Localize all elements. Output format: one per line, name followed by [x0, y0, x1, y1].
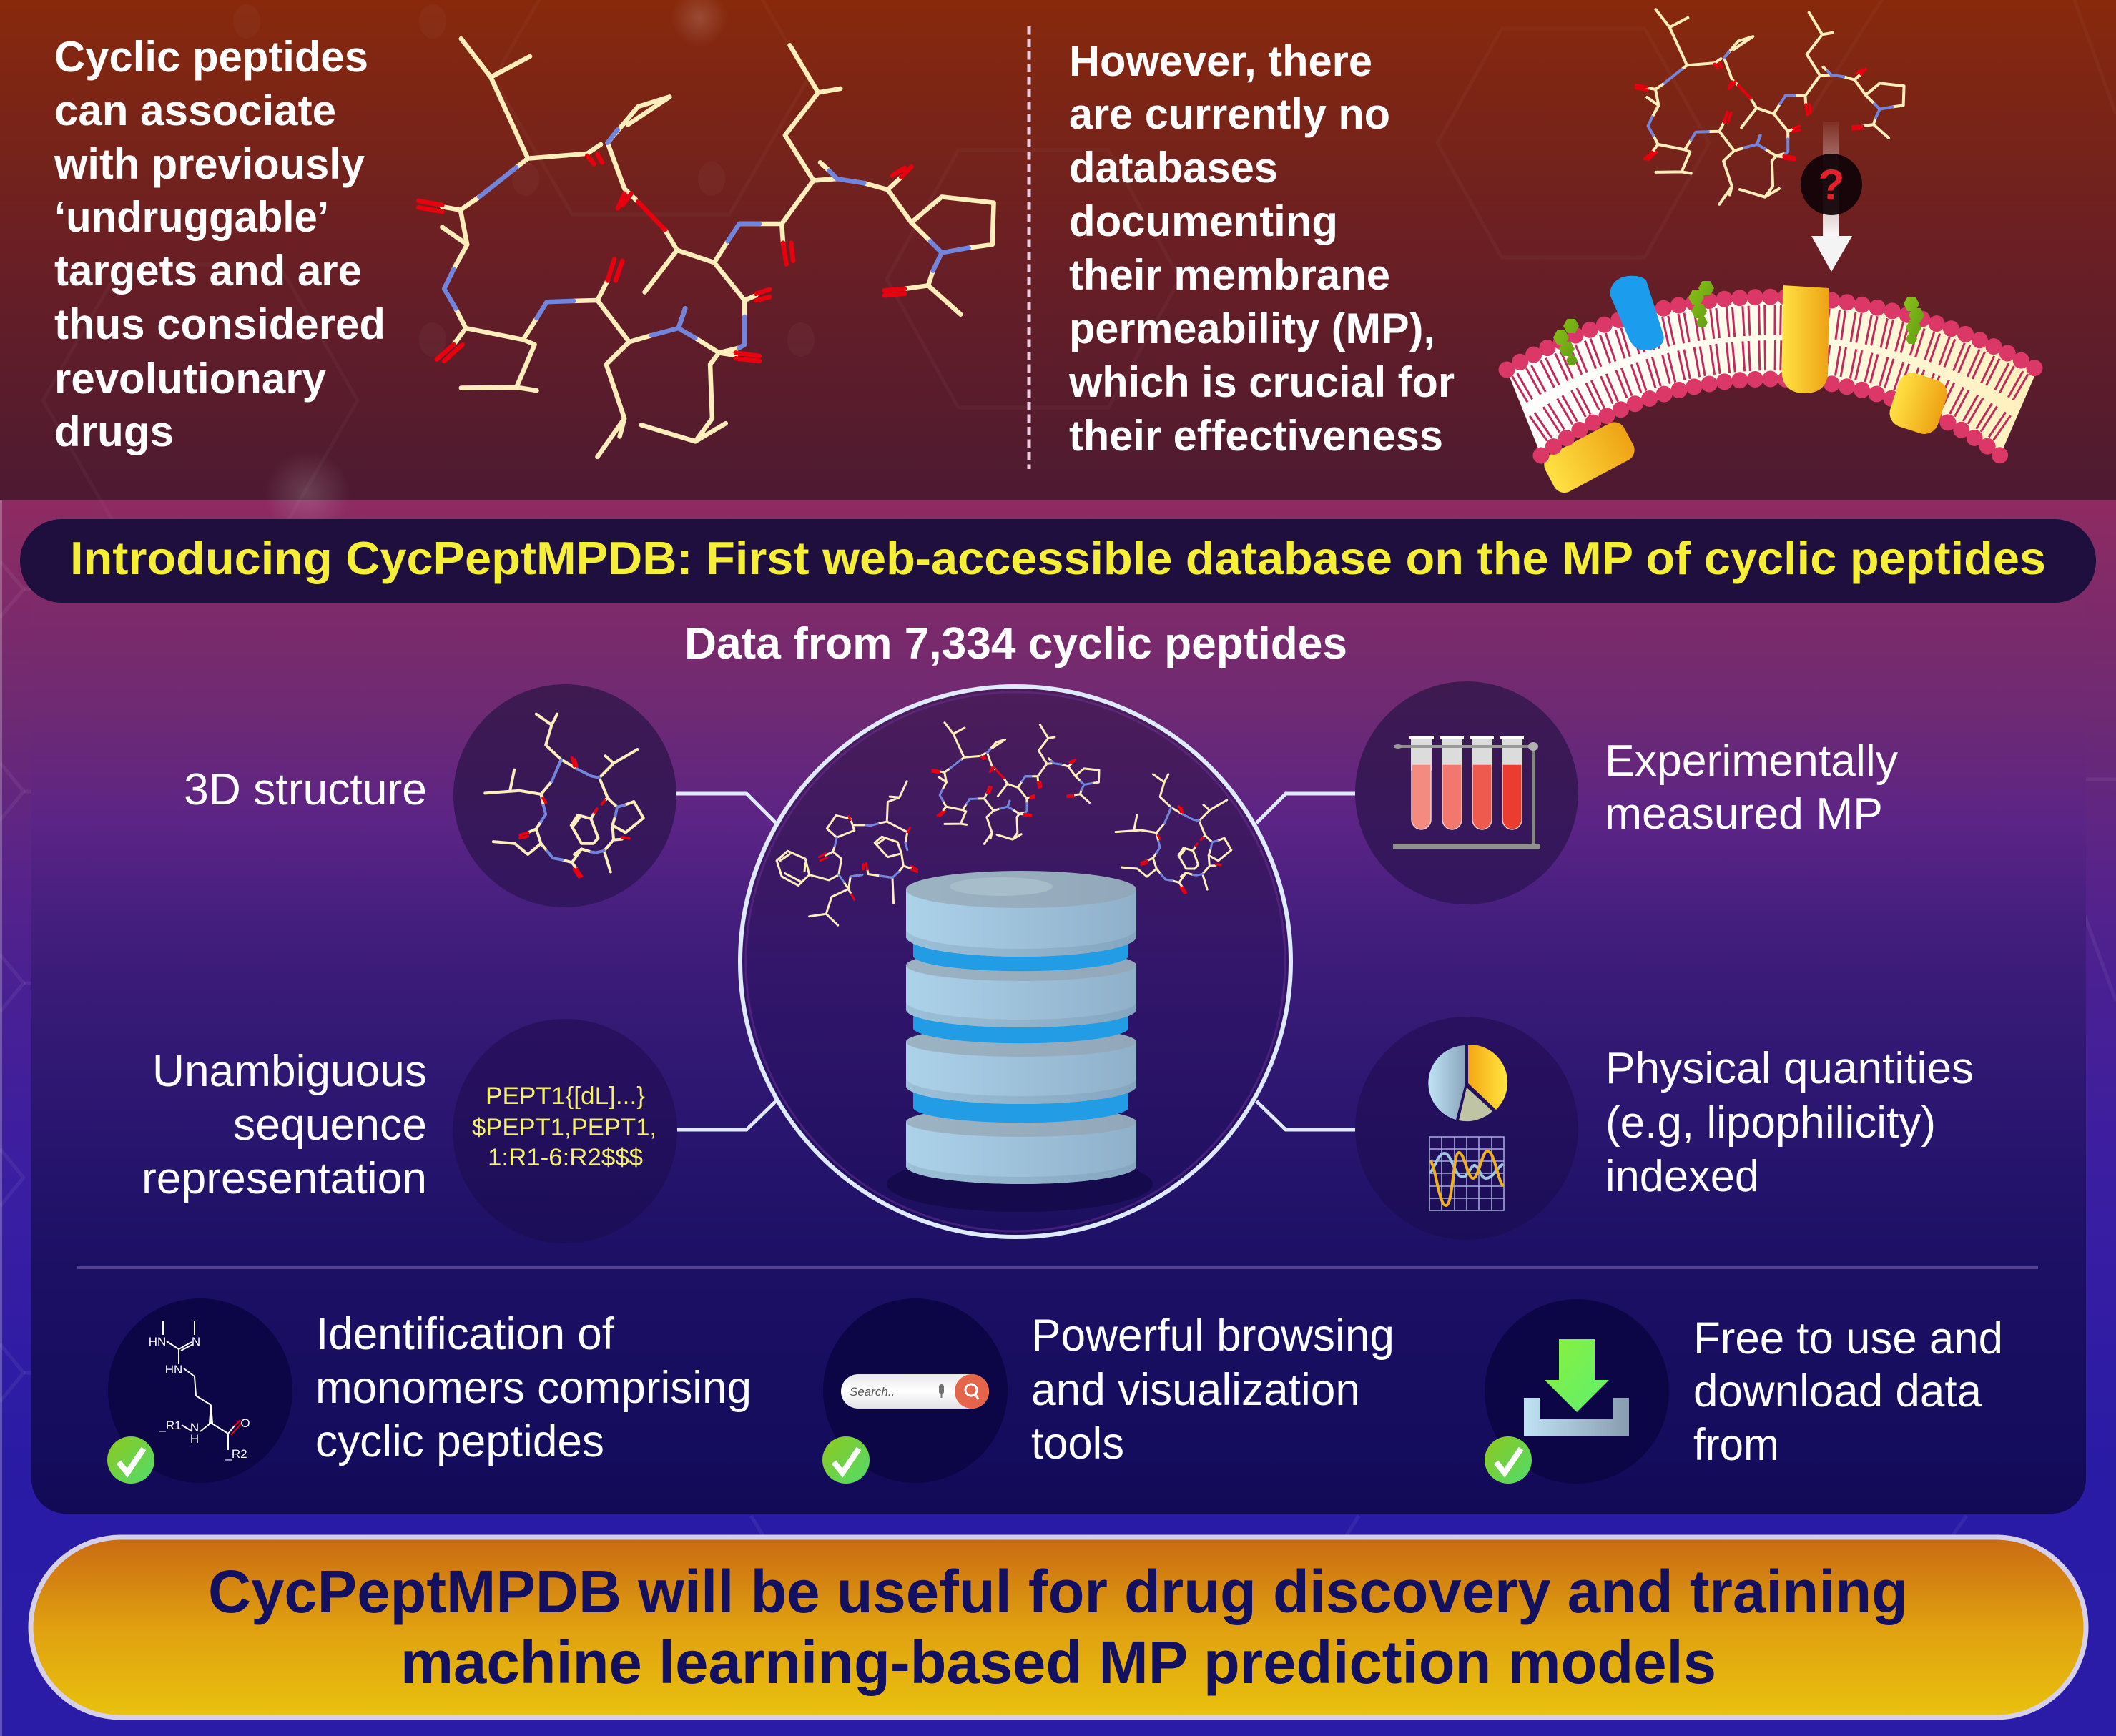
feature: sequence label	[142, 1047, 427, 1203]
icon: question mark	[1801, 154, 1862, 215]
icon: check badge	[107, 1436, 154, 1484]
icon: 3D structure	[453, 684, 676, 907]
text: monomers: Identification of	[316, 1309, 614, 1359]
feature: sequence label: sequence	[233, 1100, 427, 1150]
text: no databases: permeability (MP),	[1069, 305, 1435, 352]
icon: monomer structure: _R2	[224, 1447, 247, 1461]
text: cyclic peptides intro: revolutionary	[54, 355, 327, 403]
text: browsing: Powerful browsing	[1031, 1311, 1394, 1361]
text: cyclic peptides intro: can associate	[54, 87, 336, 134]
protein: central gold	[1782, 285, 1829, 393]
protein: right gold	[1886, 369, 1951, 438]
wave chart	[1429, 1137, 1504, 1210]
text: no databases: databases	[1069, 144, 1278, 192]
feature: physical quantities label	[1605, 1044, 1974, 1201]
text: no databases: documenting	[1069, 197, 1338, 245]
icon: monomer structure: N	[190, 1421, 199, 1434]
glycans	[1553, 281, 1924, 365]
feature: physical quantities label: (e.g, lipophilicity)	[1605, 1098, 1936, 1148]
icon: sequence representation: $PEPT1,PEPT1,	[472, 1114, 656, 1141]
feature: measured MP label: Experimentally	[1605, 736, 1898, 786]
banner: title pill: Introducing CycPeptMPDB: First web-accessible database on the MP of cyclic peptides	[70, 532, 2046, 584]
molecule: center left	[777, 781, 917, 925]
text: monomers: cyclic peptides	[315, 1416, 604, 1466]
text: browsing: tools	[1031, 1419, 1124, 1469]
connectors	[676, 794, 1355, 1130]
icon: cell membrane	[1507, 276, 2037, 497]
feature: measured MP label	[1605, 736, 1898, 839]
icon: sequence representation: PEPT1{[dL]...}	[486, 1082, 645, 1110]
icon: database cylinder	[887, 871, 1153, 1212]
text: cyclic peptides intro: targets and are	[54, 247, 362, 295]
protein: blue	[1610, 276, 1664, 350]
icon: monomer structure: H	[190, 1432, 199, 1446]
text: free download: download data	[1693, 1366, 1982, 1416]
text: cyclic peptides intro: with previously	[54, 140, 365, 188]
callout: conclusion pill: CycPeptMPDB will be useful for drug discovery and training	[208, 1558, 1908, 1625]
feature: physical quantities label: Physical quantities	[1605, 1044, 1974, 1093]
panel: central circle with database	[740, 686, 1291, 1237]
text: no databases	[1068, 37, 1455, 460]
text: browsing	[1031, 1311, 1394, 1469]
glow accents	[107, 0, 815, 1015]
text: cyclic peptides intro: Cyclic peptides	[54, 33, 368, 81]
molecule: center right	[1116, 774, 1231, 893]
icon: search bar	[823, 1298, 1008, 1483]
text: monomers	[315, 1309, 752, 1466]
icon: download	[1485, 1299, 1669, 1484]
icon: pie and wave chart	[1355, 1017, 1578, 1240]
icon: test tubes	[1355, 681, 1578, 904]
icon: monomer structure: HN	[165, 1363, 182, 1376]
panel: dark features panel	[31, 565, 2086, 1514]
text: no databases: their effectiveness	[1069, 412, 1443, 460]
feature: sequence label: Unambiguous	[152, 1047, 427, 1096]
molecule: small peptide above membrane	[1636, 9, 1904, 204]
text: free download: Free to use and	[1693, 1313, 2003, 1363]
pie chart	[1428, 1045, 1507, 1121]
feature: 3D structure label: 3D structure	[184, 765, 427, 814]
banner: title pill	[20, 519, 2096, 603]
icon: monomer structure: O	[240, 1416, 250, 1430]
text: no databases: which is crucial for	[1068, 358, 1455, 406]
molecule: center top	[932, 723, 1099, 844]
text: browsing: and visualization	[1031, 1365, 1360, 1415]
feature: measured MP label: measured MP	[1605, 789, 1883, 839]
icon: monomer structure: N	[192, 1335, 200, 1348]
text: no databases: However, there	[1069, 37, 1372, 85]
text: cyclic peptides intro: drugs	[54, 408, 174, 455]
heading: data count: Data from 7,334 cyclic peptides	[684, 619, 1347, 669]
protein: lower left gold	[1540, 418, 1638, 497]
feature: physical quantities label: indexed	[1605, 1152, 1759, 1201]
feature: sequence label: representation	[142, 1154, 427, 1203]
icon: monomer structure: _R1	[158, 1419, 182, 1432]
text: cyclic peptides intro	[54, 33, 385, 455]
divider: dashed vertical	[1027, 26, 1031, 469]
text: free download	[1693, 1313, 2003, 1470]
icon: monomer structure	[108, 1298, 292, 1483]
icon: check badge	[822, 1436, 870, 1484]
icon: sequence representation: 1:R1-6:R2$$$	[488, 1144, 643, 1171]
text: cyclic peptides intro: ‘undruggable’	[54, 193, 329, 241]
text: free download: from	[1693, 1420, 1779, 1470]
text: no databases: are currently no	[1069, 90, 1390, 138]
icon: search bar: Search..	[850, 1385, 895, 1399]
text: monomers: monomers comprising	[315, 1363, 752, 1413]
text: no databases: their membrane	[1069, 251, 1390, 299]
divider: horizontal	[77, 1266, 2038, 1269]
text: cyclic peptides intro: thus considered	[54, 300, 385, 348]
icon: sequence representation	[453, 1019, 677, 1243]
arrow: peptide to membrane	[1801, 122, 1862, 272]
icon: question mark: ?	[1819, 161, 1844, 209]
molecule: large cyclic peptide	[418, 39, 994, 457]
callout: conclusion pill: machine learning-based MP prediction models	[400, 1629, 1716, 1696]
icon: monomer structure: HN	[149, 1335, 166, 1348]
callout: conclusion pill	[31, 1537, 2086, 1717]
icon: check badge	[1485, 1436, 1532, 1484]
